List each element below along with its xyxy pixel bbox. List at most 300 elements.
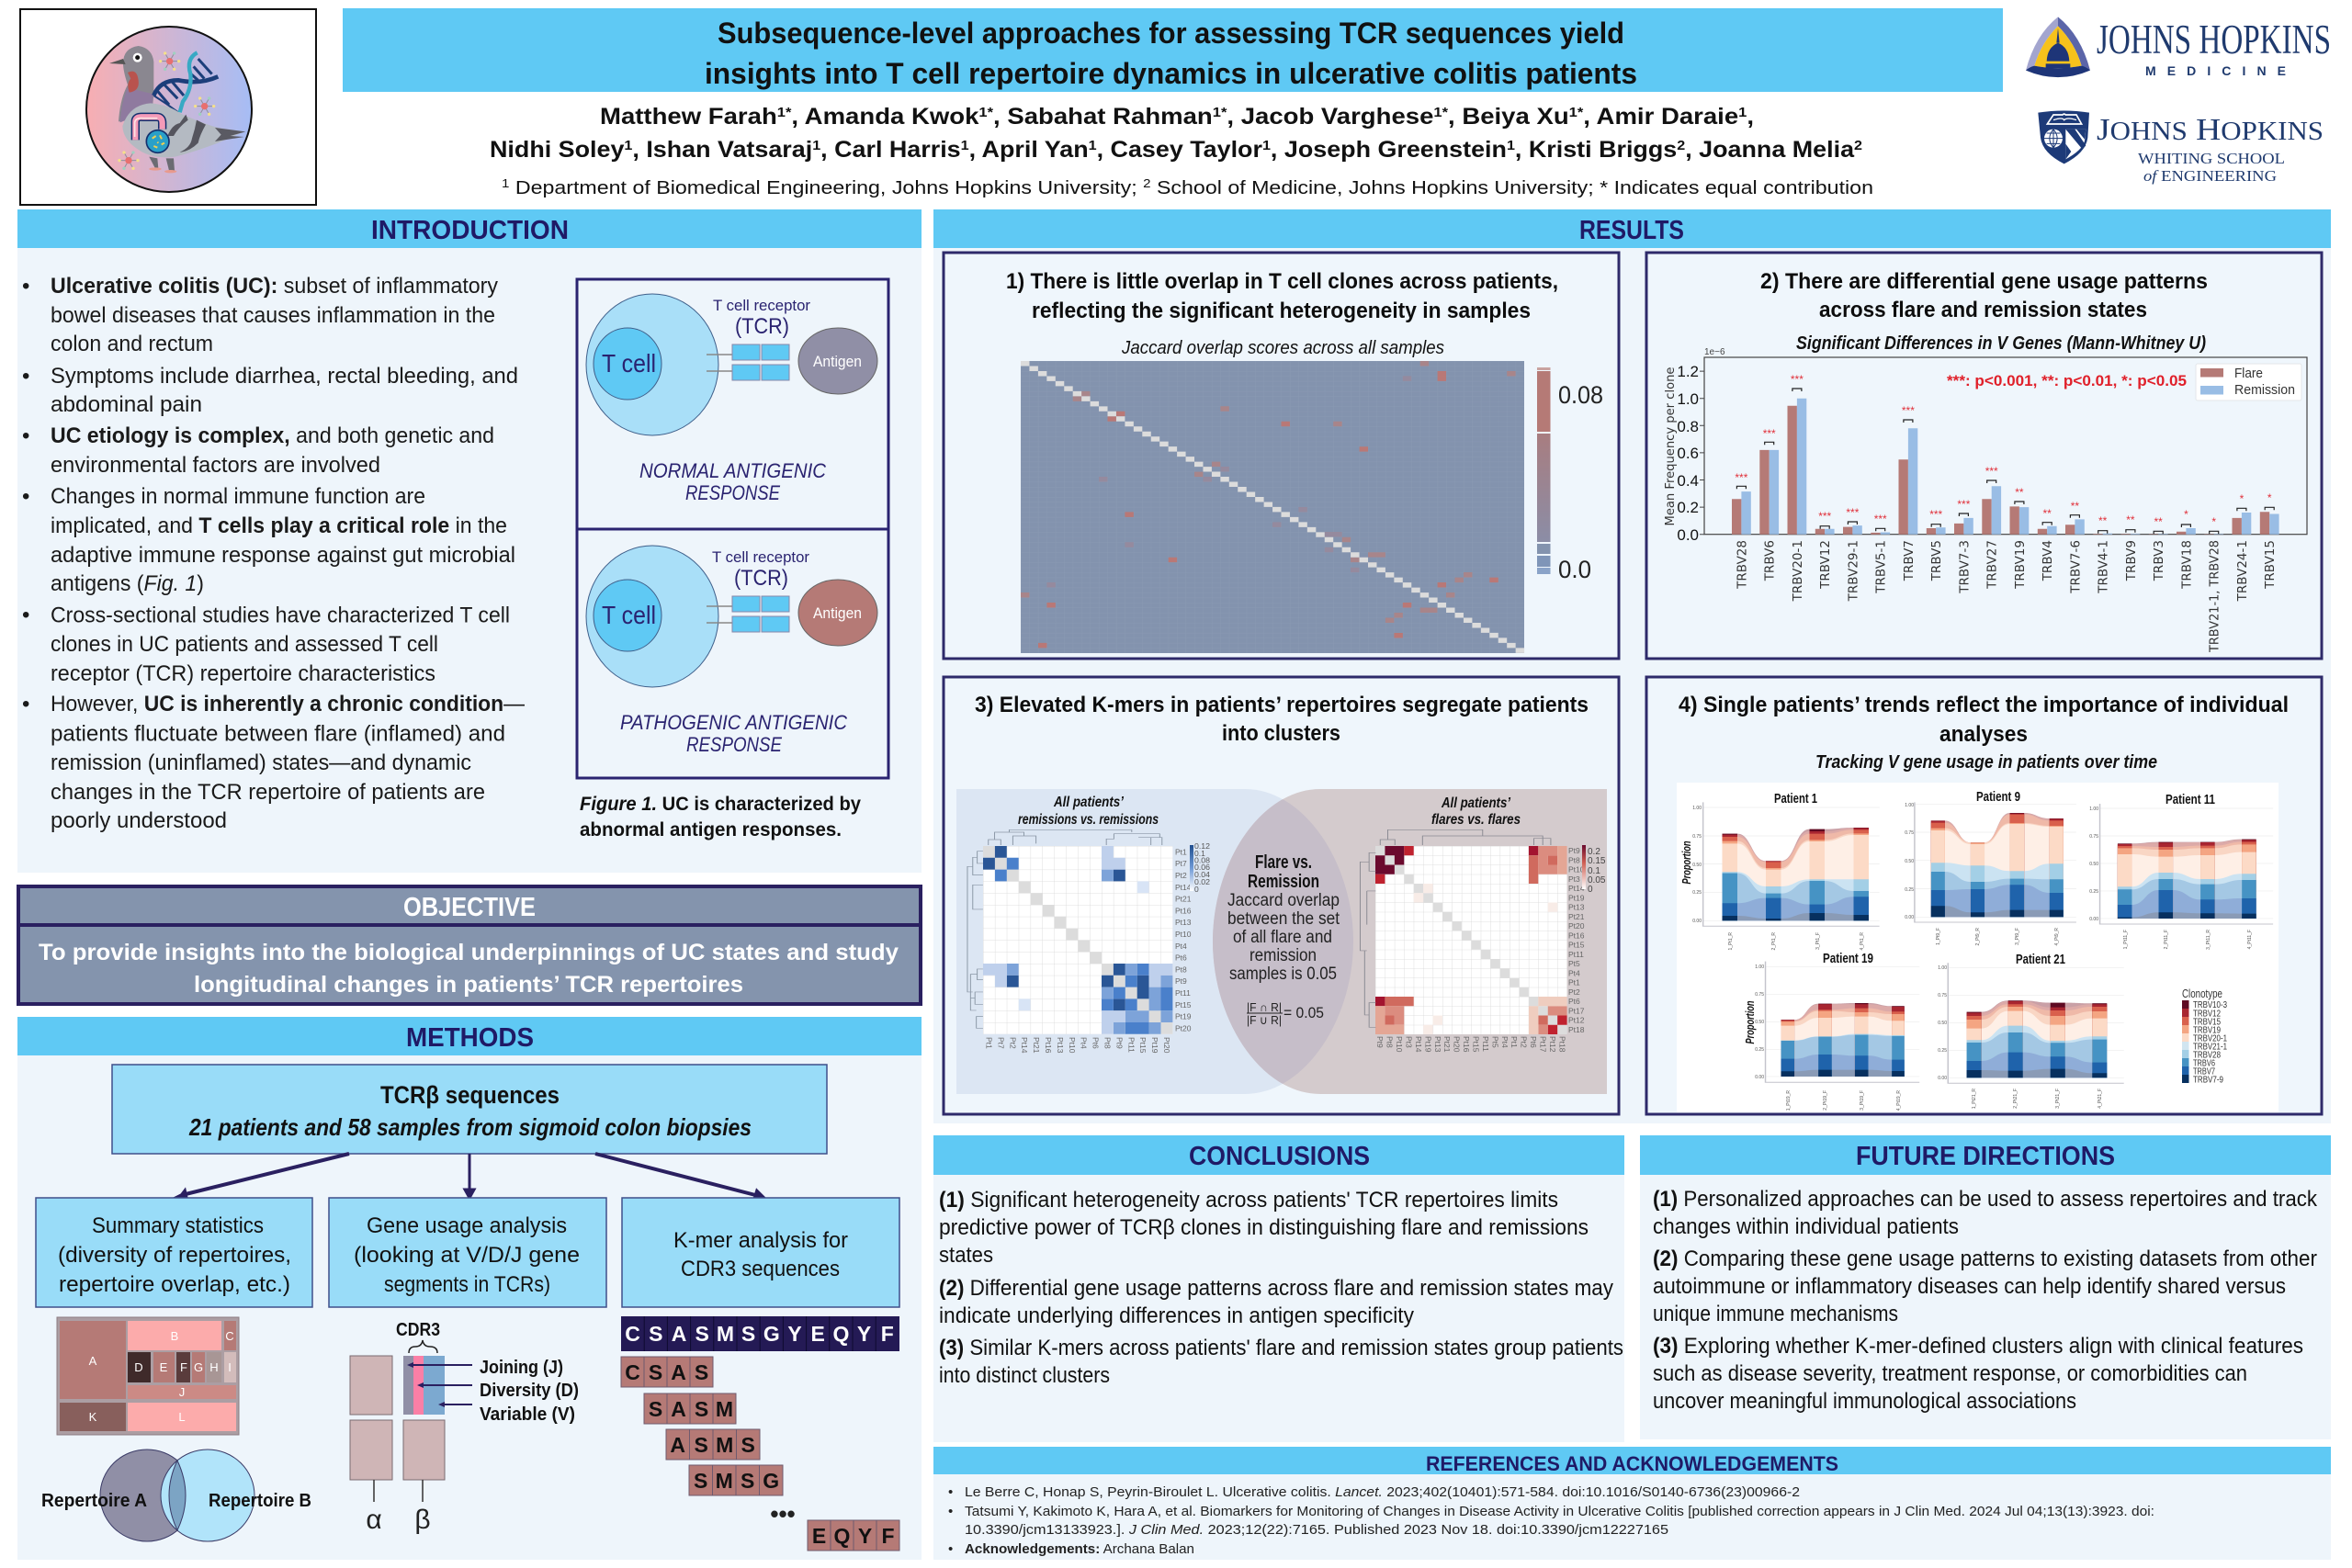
heatmap: flares: Pt13 [1568, 903, 1585, 912]
objective statement: longitudinal changes in patients’ TCR repertoires [194, 972, 743, 998]
bar chart: TRBV12 [1818, 540, 1833, 590]
figure 1: pathogenic antigenic response: T cell [602, 601, 656, 629]
bullet list: antigens (Fig. 1) [51, 571, 204, 596]
future directions text [1653, 1187, 2318, 1414]
heading: introduction: INTRODUCTION [371, 216, 569, 245]
heatmap: flares: 0.2 [1588, 847, 1600, 857]
heatmap: remissions: 0.06 [1194, 863, 1210, 872]
logo: Johns Hopkins Whiting School of Engineering [2038, 110, 2324, 185]
title banner: insights into T cell repertoire dynamics in ulcerative colitis patients [705, 57, 1637, 90]
chart: patient 21: 4_Pt21_F [2098, 1089, 2103, 1109]
chart: patient 11: 2_Pt11_F [2164, 930, 2169, 949]
chart: patient 11: 1.00 [2089, 807, 2098, 812]
future directions text: uncover meaningful immunological associations [1653, 1389, 2076, 1414]
bar chart: * [2184, 508, 2188, 521]
top box: sequences: TCRβ sequences [380, 1081, 560, 1109]
chart: patient 1: 2_Pt1_R [1771, 932, 1777, 950]
chart: patient 19 [1743, 951, 1919, 1111]
heatmap: flares: Pt19 [1568, 893, 1585, 902]
heatmap: flares: Pt2 [1520, 1036, 1529, 1048]
top box: sequences [112, 1065, 827, 1154]
bullet list: Ulcerative colitis (UC): subset of inflammatory [51, 274, 498, 299]
bullet list: • [22, 603, 29, 627]
heatmap: flares: Pt9 [1375, 1036, 1385, 1048]
chart subtitle: Significant Differences in V Genes (Mann-Whitney U) [1796, 333, 2206, 354]
figure caption: abnormal antigen responses. [580, 819, 842, 840]
bar chart: *** [1791, 373, 1804, 386]
heatmap: remissions: Pt1 [985, 1037, 994, 1049]
bar chart: TRBV27 [1985, 540, 2000, 590]
heatmap: flares: Pt4 [1500, 1036, 1510, 1048]
reference list: • [948, 1484, 953, 1500]
clonotype legend: TRBV20-1 [2193, 1034, 2227, 1043]
bar chart: *** [1874, 513, 1887, 525]
result 4 heading: 4) Single patients’ trends reflect the importance of individual [1679, 693, 2289, 717]
chart: patient 9: 0.00 [1905, 915, 1914, 920]
heatmap: flares: Pt16 [1568, 931, 1585, 940]
heatmap: flares: Pt21 [1442, 1036, 1452, 1053]
venn backdrop: remission, flare and overlap [956, 789, 1607, 1094]
chart: patient 11: 0.25 [2089, 889, 2098, 895]
bullet list: implicated, and T cells play a critical role in the [51, 513, 507, 538]
chart: patient 19: 0.50 [1755, 1020, 1764, 1025]
future directions text: unique immune mechanisms [1653, 1302, 1898, 1326]
chart backdrop [1677, 783, 2278, 1112]
result 3 heading: 3) Elevated K-mers in patients’ repertoires segregate patients [975, 693, 1589, 717]
panel: methods [17, 1017, 922, 1560]
result 4 heading [1679, 693, 2289, 747]
reference list: Acknowledgements: Archana Balan [965, 1541, 1194, 1557]
clonotype legend: TRBV15 [2193, 1018, 2221, 1027]
chart: patient 1: Proportion [1679, 840, 1693, 884]
reference list: Le Berre C, Honap S, Peyrin-Biroulet L. Ulcerative colitis. Lancet. 2023;402(10401):571-584. doi:10.1016/S0140-6736(23)00966-2 [965, 1484, 1800, 1500]
chart: patient 21: 0.50 [1938, 1021, 1947, 1026]
bar chart: TRBV6 [1763, 540, 1778, 581]
chart: patient 9: 0.50 [1905, 859, 1914, 864]
heatmap: flares: Pt5 [1568, 959, 1580, 968]
TCR chain diagram: Joining (J) [480, 1358, 563, 1378]
bar chart: TRBV4 [2041, 540, 2055, 581]
bullet list: However, UC is inherently a chronic condition— [51, 692, 525, 716]
reference list: Tatsumi Y, Kakimoto K, Hara A, et al. Biomarkers for Monitoring of Changes in Disease Activity in Ulcerative Colitis [published correction appears in J Clin Med. 2024 Jul 04;13(13):3923. doi: [965, 1504, 2154, 1519]
panel: conclusions [933, 1135, 1624, 1442]
chart: patient 19: 3_Pt19_F [1860, 1090, 1865, 1111]
chart: patient 1: 0.25 [1692, 890, 1702, 896]
overlap callout [1227, 852, 1340, 1027]
heading: results: RESULTS [1579, 216, 1684, 245]
clonotype legend: TRBV19 [2193, 1025, 2221, 1036]
heatmap: remissions: Pt13 [1175, 918, 1192, 927]
bullet list: Changes in normal immune function are [51, 484, 425, 509]
k-mer diagram: CSAS [625, 1360, 708, 1384]
heatmap: remissions: 0.1 [1194, 849, 1205, 858]
panel: objective [18, 886, 921, 1004]
heatmap: remissions [967, 829, 1210, 1054]
bullet list: Cross-sectional studies have characterized T cell [51, 603, 510, 628]
left heading: remissions: All patients’ [1053, 795, 1124, 810]
bullet list: bowel diseases that causes inflammation in the [51, 303, 495, 328]
figure 1: normal antigenic response: Antigen [813, 353, 862, 370]
chart: patient 9: 1.00 [1905, 803, 1914, 808]
treemap: G [194, 1360, 203, 1374]
bar chart: ** [2071, 500, 2079, 513]
heatmap: remissions: Pt2 [1175, 871, 1187, 880]
bullet list: colon and rectum [51, 332, 213, 356]
k-mer diagram [621, 1316, 899, 1551]
heatmap: flares: 0.05 [1588, 875, 1606, 886]
heatmap: remissions: Pt19 [1150, 1037, 1159, 1054]
bullet list: remission (uninflamed) states—and dynamic [51, 750, 471, 775]
result 1 heading: reflecting the significant heterogeneity in samples [1032, 299, 1531, 323]
bar chart: *** [1957, 498, 1971, 511]
conclusions text: into distinct clusters [939, 1363, 1110, 1388]
heatmap: flares: Pt19 [1423, 1036, 1432, 1053]
chart: patient 9: 1_Pt9_F [1936, 928, 1941, 945]
conclusions text: states [939, 1243, 993, 1268]
arrow: to summary statistics [176, 1154, 349, 1200]
heatmap: remissions: Pt21 [1032, 1037, 1041, 1054]
k-mer diagram: ••• [770, 1500, 796, 1528]
heatmap: flares: Pt18 [1557, 1036, 1566, 1053]
clonotype legend [2182, 987, 2227, 1086]
heatmap: remissions: Pt14 [1175, 883, 1192, 892]
box: gene usage analysis: (looking at V/D/J gene [354, 1243, 580, 1268]
result 3 heading: into clusters [1222, 721, 1340, 746]
bullet list [22, 274, 525, 833]
treemap: H [209, 1360, 219, 1374]
heatmap: remissions: Pt7 [1175, 859, 1187, 868]
heatmap: remissions: 0 [1194, 885, 1199, 894]
bar chart: 0.4 [1677, 472, 1699, 490]
bar chart: 0.8 [1677, 418, 1699, 435]
chart: patient 19: 1.00 [1755, 964, 1764, 970]
clonotype legend: TRBV21-1 [2193, 1042, 2227, 1053]
heatmap: flares: Pt8 [1385, 1036, 1395, 1048]
legend: Flare [2234, 366, 2263, 381]
objective statement: To provide insights into the biological underpinnings of UC states and study [39, 940, 899, 965]
reference list: • [948, 1541, 953, 1557]
heatmap: remissions: Pt2 [1008, 1037, 1017, 1049]
treemap: C [225, 1329, 234, 1343]
result 2 heading: across flare and remission states [1819, 298, 2147, 322]
heatmap: flares: Pt3 [1404, 1036, 1413, 1048]
bar chart: ** [2098, 514, 2108, 527]
heatmap: remissions: Pt8 [1175, 964, 1187, 974]
figure 1: pathogenic antigenic response: (TCR) [734, 566, 788, 591]
chart: patient 21 [1938, 952, 2124, 1109]
figure 1: pathogenic antigenic response: PATHOGENIC ANTIGENIC [620, 711, 847, 734]
k-mer diagram: EQYF [812, 1524, 895, 1548]
heatmap: flares: Pt20 [1453, 1036, 1462, 1053]
chart: patient 21: 1_Pt21_R [1972, 1089, 1977, 1109]
reference list: • [948, 1504, 953, 1519]
heatmap: flares: Pt4 [1568, 968, 1580, 977]
chart: patient 21: 0.25 [1938, 1048, 1947, 1054]
heatmap: flares: Pt14 [1414, 1036, 1423, 1053]
chart: patient 21: Patient 21 [2016, 952, 2065, 967]
heatmap colour bar: 0.08 [1558, 381, 1603, 409]
bullet list: abdominal pain [51, 392, 202, 417]
bar chart: TRBV7-6 [2068, 540, 2083, 594]
conclusions text [939, 1188, 1623, 1388]
heading: references: REFERENCES AND ACKNOWLEDGEMENTS [1426, 1452, 1838, 1475]
heatmap: remissions: Pt9 [1175, 976, 1187, 986]
k-mer diagram: ASMS [670, 1433, 755, 1457]
chart: patient 19: 0.00 [1755, 1075, 1764, 1080]
heatmap: flares: Pt21 [1568, 912, 1585, 921]
bar chart: *** [1902, 404, 1915, 417]
clonotype legend: TRBV7-9 [2193, 1075, 2223, 1086]
heatmap: remissions: Pt10 [1175, 930, 1192, 939]
heatmap colour bar [1537, 367, 1603, 583]
arrow: to gene usage [465, 1154, 474, 1198]
figure 1: pathogenic antigenic response [577, 529, 888, 778]
top box: sequences: 21 patients and 58 samples from sigmoid colon biopsies [188, 1113, 752, 1141]
chart: patient 1: 0.00 [1692, 919, 1702, 924]
heatmap: flares: Pt15 [1472, 1036, 1481, 1053]
overlap callout: Flare vs. [1255, 852, 1312, 873]
heatmap: flares: Pt5 [1490, 1036, 1499, 1048]
bar chart: TRBV3 [2152, 540, 2166, 581]
bar chart: TRBV19 [2013, 540, 2028, 590]
chart: patient 11: 0.75 [2089, 834, 2098, 840]
venn diagram: repertoire overlap [41, 1450, 311, 1541]
figure 1: normal antigenic response: NORMAL ANTIGENIC [639, 459, 826, 482]
box: k-mer analysis: K-mer analysis for [673, 1228, 848, 1253]
bar chart: ** [2015, 486, 2024, 499]
clonotype legend: TRBV10-3 [2193, 1000, 2227, 1010]
figure 1: pathogenic antigenic response: T cell receptor [712, 548, 809, 566]
bar chart [1663, 347, 2307, 653]
bar chart: *** [1818, 510, 1832, 523]
bar chart: TRBV20-1 [1791, 540, 1805, 602]
conclusions text: indicate underlying differences in antigen specificity [939, 1303, 1414, 1328]
heatmap: remissions: Pt6 [1091, 1037, 1101, 1049]
result 2 heading [1760, 269, 2208, 322]
bar chart: TRBV18 [2179, 540, 2194, 590]
chart: patient 19: 0.75 [1755, 992, 1764, 998]
heatmap: remissions: 0.12 [1194, 841, 1210, 851]
treemap: L [178, 1410, 186, 1424]
box: gene usage analysis [329, 1198, 606, 1307]
chart: patient 11: 4_Pt11_F [2247, 930, 2253, 949]
heading: methods: METHODS [406, 1023, 534, 1053]
box: summary statistics: (diversity of repertoires, [58, 1243, 291, 1268]
bar chart: 1e−6 [1704, 347, 1725, 357]
legend [2196, 364, 2301, 400]
right heading: flares [1431, 795, 1521, 828]
TCR chain diagram: Diversity (D) [480, 1381, 579, 1401]
right heading: flares: flares vs. flares [1431, 812, 1521, 828]
chart: patient 21: 0.00 [1938, 1076, 1947, 1081]
chart: patient 11: 3_Pt11_R [2206, 930, 2211, 950]
bar chart: *** [1846, 506, 1860, 519]
objective statement [39, 940, 899, 998]
significance key: ***: p<0.001, **: p<0.01, *: p<0.05 [1947, 372, 2187, 389]
TCR chain diagram [350, 1320, 579, 1535]
clonotype legend: TRBV6 [2193, 1058, 2215, 1069]
bullet list: UC etiology is complex, and both genetic and [51, 423, 494, 448]
chart: patient 19: 4_Pt19_R [1896, 1090, 1902, 1111]
conclusions text: (3) Similar K-mers across patients' flare and remission states group patients [939, 1336, 1623, 1360]
logo: Johns Hopkins Medicine: MEDICINE [2145, 63, 2286, 78]
heatmap: remissions: Pt10 [1068, 1037, 1077, 1054]
bar chart: * [2211, 515, 2216, 528]
k-mer diagram: SASM [649, 1397, 733, 1421]
overlap callout: |F ∩ R| [1247, 1000, 1282, 1014]
bar chart: *** [1763, 427, 1776, 440]
overlap callout: Remission [1248, 872, 1319, 892]
box: k-mer analysis [622, 1198, 899, 1307]
heatmap: flares: Pt11 [1568, 950, 1584, 959]
bar chart: 0.0 [1677, 526, 1699, 544]
heatmap: flares: Pt17 [1538, 1036, 1547, 1053]
box: gene usage analysis: segments in TCRs) [384, 1272, 550, 1297]
result 2: V gene bar chart [1646, 253, 2322, 659]
result 4 heading: analyses [1939, 722, 2028, 747]
overlap callout: = 0.05 [1283, 1004, 1324, 1021]
figure 1: normal antigenic response: T cell receptor [713, 297, 810, 314]
chart: patient 1: 3_Pt1_F [1815, 932, 1821, 950]
TCR chain diagram: α [366, 1505, 382, 1535]
bar chart: 1.2 [1677, 363, 1699, 380]
chart: patient 9: 0.25 [1905, 887, 1914, 893]
heatmap: flares: Pt9 [1568, 846, 1580, 855]
chart: patient 19: 1_Pt19_R [1786, 1090, 1792, 1111]
heatmap: flares: Pt1 [1510, 1036, 1519, 1048]
bullet list: environmental factors are involved [51, 453, 380, 478]
heatmap: remissions: Pt7 [996, 1037, 1005, 1049]
heatmap: flares: Pt13 [1433, 1036, 1442, 1053]
chart: patient 9 [1905, 789, 2076, 945]
bar chart: TRBV7-3 [1957, 540, 1972, 594]
bar chart: * [2240, 492, 2245, 505]
overlap callout: samples is 0.05 [1229, 964, 1337, 984]
figure 1: pathogenic antigenic response: RESPONSE [686, 733, 782, 756]
clonotype legend: Clonotype [2182, 987, 2222, 1000]
heatmap: flares: Pt6 [1529, 1036, 1538, 1048]
heatmap: remissions: 0.02 [1194, 877, 1210, 886]
heatmap [1021, 361, 1524, 653]
chart: patient 19: 2_Pt19_F [1823, 1090, 1828, 1111]
box: summary statistics [36, 1198, 312, 1307]
left heading: remissions [1018, 795, 1159, 828]
reference list: 10.3390/jcm13133923.]. J Clin Med. 2023;12(22):7165. Published 2023 Nov 18. doi:10.3390/jcm12227165 [965, 1522, 1668, 1538]
bar chart: ** [2126, 513, 2135, 526]
bullet list: • [22, 484, 29, 509]
heading: objective: OBJECTIVE [403, 893, 536, 922]
bar chart: *** [1929, 508, 1943, 521]
treemap: F [180, 1360, 187, 1374]
heatmap colour bar: 0.0 [1558, 556, 1591, 583]
panel: references and acknowledgements [933, 1447, 2331, 1560]
bar chart: Mean Frequency per clone [1663, 367, 1678, 525]
bar chart: TRBV28 [1735, 540, 1749, 590]
heatmap: flares [1360, 829, 1606, 1053]
treemap: K [89, 1410, 97, 1424]
bar chart: ** [2043, 507, 2052, 520]
chart: patient 1: Patient 1 [1774, 791, 1817, 807]
result 4 subtitle: Tracking V gene usage in patients over time [1815, 752, 2157, 773]
chart: patient 1: 0.50 [1692, 863, 1702, 868]
result 1 heading: 1) There is little overlap in T cell clones across patients, [1006, 269, 1558, 294]
bullet list: • [22, 274, 29, 299]
heatmap: flares: 0.15 [1588, 856, 1606, 866]
chart: patient 9: 3_Pt9_F [2015, 928, 2020, 945]
conclusions text: (2) Differential gene usage patterns across flare and remission states may [939, 1276, 1613, 1301]
k-mer diagram: SMSG [694, 1469, 779, 1493]
bar chart: TRBV15 [2263, 540, 2278, 590]
result 1 heading [1006, 269, 1558, 323]
logo: Johns Hopkins Whiting School of Engineering: WHITING SCHOOL [2138, 150, 2285, 167]
heatmap: flares: Pt17 [1568, 1006, 1585, 1015]
bar chart: 0.2 [1677, 499, 1699, 516]
conclusions text: (1) Significant heterogeneity across patients' TCR repertoires limits [939, 1188, 1558, 1213]
authors: Nidhi Soley 1, Ishan Vatsaraj 1, Carl Harris 1, April Yan 1, Casey Taylor 1, Joseph Greenstein 1, Kristi Briggs 2, Joanna Melia 2 [490, 137, 1862, 163]
chart: patient 11: 0.50 [2089, 862, 2098, 867]
bar chart: 0.6 [1677, 445, 1699, 462]
chart: patient 1: 4_Pt1_R [1860, 932, 1865, 950]
figure caption: Figure 1. UC is characterized by [580, 794, 861, 815]
bullet list: patients fluctuate between flare (inflamed) and [51, 722, 505, 747]
chart: patient 21: 2_Pt21_F [2013, 1089, 2018, 1109]
figure 1: normal antigenic response: T cell [602, 349, 656, 378]
heatmap: remissions: Pt15 [1138, 1037, 1148, 1054]
arrow: to k-mer analysis [595, 1154, 764, 1201]
bullet list: adaptive immune response against gut microbial [51, 543, 515, 568]
result 1: jaccard overlap heatmap [944, 253, 1619, 659]
heatmap: flares: Pt20 [1568, 921, 1585, 931]
heatmap: flares: 0.1 [1588, 866, 1600, 876]
logo: Johns Hopkins Whiting School of Engineering: JOHNS HOPKINS [2097, 113, 2324, 147]
bar chart: TRBV7 [1902, 540, 1917, 581]
chart: patient 11: 0.00 [2089, 917, 2098, 922]
bar chart: * [2267, 491, 2272, 504]
panel: future directions [1640, 1135, 2331, 1439]
heatmap: remissions: Pt14 [1020, 1037, 1029, 1054]
chart: patient 1: 1.00 [1692, 806, 1702, 811]
result 3: k-mer clusters [944, 677, 1619, 1114]
bullet list: poorly understood [51, 808, 227, 833]
result 2 heading: 2) There are differential gene usage patterns [1760, 269, 2208, 294]
heatmap: remissions: Pt6 [1175, 953, 1187, 963]
heatmap: remissions: Pt20 [1162, 1037, 1171, 1054]
title banner [343, 8, 2003, 92]
heatmap: flares: Pt11 [1481, 1036, 1490, 1052]
heatmap subtitle: Jaccard overlap scores across all samples [1121, 338, 1444, 358]
TCR chain diagram: Variable (V) [480, 1404, 575, 1425]
result 3 heading [975, 693, 1589, 746]
heatmap: remissions: Pt4 [1175, 942, 1187, 951]
chart: patient 1 [1679, 791, 1880, 950]
heatmap: remissions: Pt16 [1044, 1037, 1053, 1054]
bullet list: clones in UC patients and assessed T cell [51, 632, 438, 657]
overlap callout: of all flare and [1233, 928, 1332, 947]
venn diagram: repertoire overlap: Repertoire A [41, 1491, 147, 1511]
clonotype legend: TRBV28 [2193, 1051, 2221, 1060]
future directions text: autoimmune or inflammatory diseases can help identify shared versus [1653, 1274, 2286, 1299]
future directions text: changes within individual patients [1653, 1214, 1959, 1239]
title banner: Subsequence-level approaches for assessing TCR sequences yield [718, 17, 1624, 50]
box: k-mer analysis: CDR3 sequences [681, 1257, 840, 1281]
treemap: D [134, 1360, 143, 1374]
heatmap: flares: Pt18 [1568, 1025, 1585, 1034]
chart: patient 11 [2089, 792, 2273, 950]
bar chart: TRBV24-1 [2235, 540, 2250, 602]
heatmap: remissions: Pt1 [1175, 847, 1187, 856]
heatmap: flares: Pt14 [1568, 884, 1585, 893]
chart: patient 9: Patient 9 [1976, 789, 2020, 805]
